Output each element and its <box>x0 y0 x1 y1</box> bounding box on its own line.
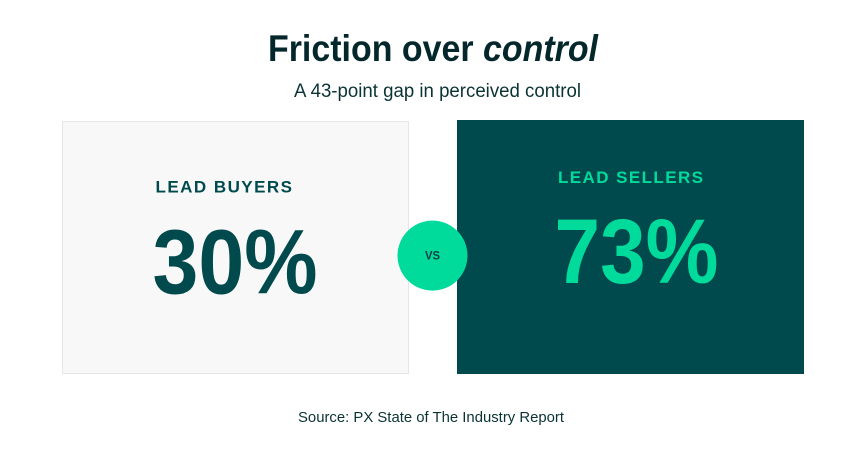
badge text: VS <box>425 251 440 263</box>
panel: lead sellers <box>457 120 804 374</box>
title: Friction over control <box>268 28 599 69</box>
panel background <box>62 122 408 374</box>
label: lead buyers: LEAD BUYERS <box>156 178 292 197</box>
source note: Source: PX State of The Industry Report <box>298 409 565 426</box>
stat: 30%: 30% <box>152 212 318 314</box>
panel: lead buyers <box>62 122 408 374</box>
subtitle: A 43-point gap in perceived control <box>294 81 581 102</box>
stat: 73%: 73% <box>554 201 718 303</box>
label: lead sellers: LEAD SELLERS <box>558 168 703 187</box>
panel background <box>457 120 804 374</box>
badge circle <box>398 221 468 291</box>
vs badge <box>398 221 468 291</box>
